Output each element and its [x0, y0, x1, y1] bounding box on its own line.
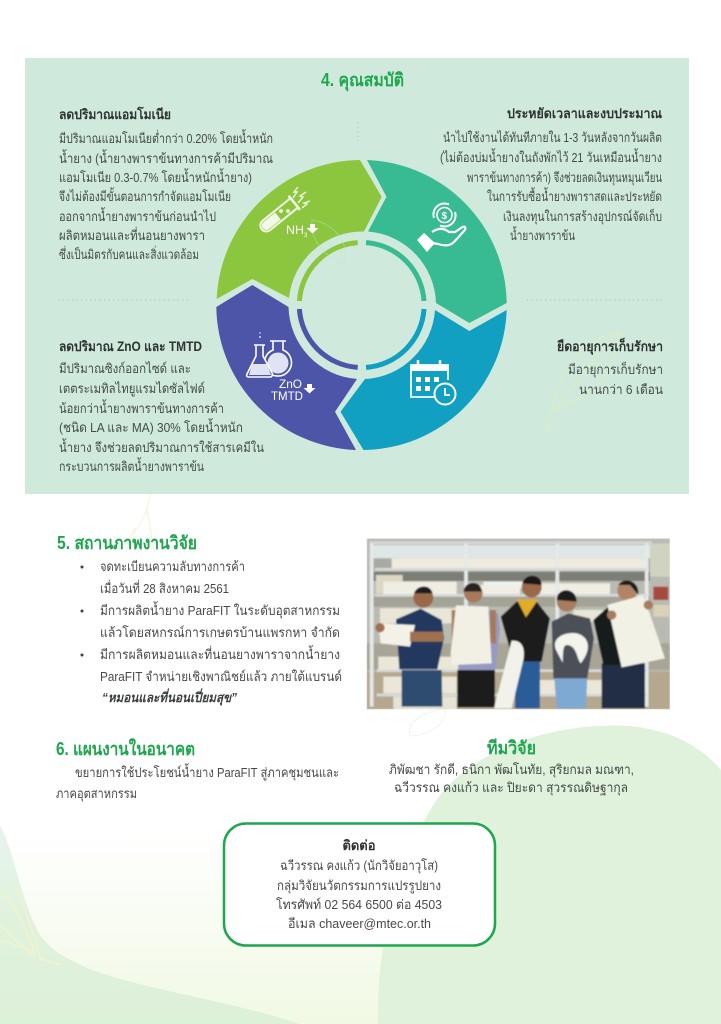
- segment: teal saving: [367, 160, 507, 323]
- contact box: โทรศัพท์ 02 564 6500 ต่อ 4503: [276, 897, 442, 912]
- text block: ZnO and TMTD: น้อยกว่าน้ำยางพาราข้นทางการค้า: [59, 399, 224, 416]
- icon: calendar and clock: [411, 360, 456, 404]
- person 5: [602, 663, 645, 708]
- icon: flasks ZnO TMTD: TMTD: [271, 391, 303, 403]
- contact box: อีเมล chaveer@mtec.or.th: [288, 916, 431, 931]
- text block: ZnO and TMTD: ลดปริมาณ ZnO และ TMTD: [59, 339, 202, 354]
- bullet list: [100, 559, 342, 706]
- text block: ammonia: ออกจากน้ำยางพาราข้นก่อนนำไป: [59, 207, 216, 224]
- contact box: กลุ่มวิจัยนวัตกรรมการแปรรูปยาง: [277, 878, 441, 894]
- inner ring arcs: [299, 243, 424, 367]
- bullet list: แล้วโดยสหกรณ์การเกษตรบ้านแพรกหา จำกัด: [100, 625, 340, 640]
- heading: ทีมวิจัย: [487, 738, 536, 758]
- text block: saving time and budget: (ไม่ต้องบ่มน้ำยางในถังพักไว้ 21 วันเหมือนน้ำยาง: [440, 148, 662, 165]
- panel: properties: [25, 58, 689, 946]
- page background: [0, 708, 721, 1024]
- segment: purple ZnO: [216, 285, 357, 450]
- text block: ZnO and TMTD: เตตระเมทิลไทยูแรมไดซัลไฟด์: [59, 381, 205, 397]
- section 6: future plan: [56, 738, 339, 802]
- icon: flasks ZnO TMTD: [247, 332, 316, 403]
- contact box: ติดต่อ: [342, 838, 376, 853]
- photo: research team holding latex pillows: [367, 538, 670, 709]
- bullet list: มีการผลิตหมอนและที่นอนยางพาราจากน้ำยาง: [100, 645, 340, 662]
- text block: ammonia: ลดปริมาณแอมโมเนีย: [59, 105, 171, 122]
- text block: saving time and budget: [440, 106, 662, 243]
- person 4: [554, 675, 587, 708]
- bullet list: จดทะเบียนความลับทางการค้า: [100, 559, 245, 574]
- text block: saving time and budget: ในการรับซื้อน้ำยางพาราสดและประหยัด: [487, 187, 662, 204]
- contact box: [224, 824, 495, 946]
- person 3: [515, 662, 540, 708]
- text block: saving time and budget: นำไปใช้งานได้ทันทีภายใน 1-3 วันหลังจากวันผลิต: [443, 130, 662, 145]
- leaf decoration near section 5: [118, 494, 154, 552]
- text block: ZnO and TMTD: มีปริมาณซิงก์ออกไซด์ และ: [59, 361, 191, 376]
- text block: saving time and budget: เงินลงทุนในการสร้างอุปกรณ์จัดเก็บ: [503, 207, 662, 225]
- segment: blue storage: [340, 310, 507, 450]
- person 1: [402, 670, 442, 707]
- icon: test tube NH3: NH: [286, 225, 304, 237]
- segment: green ammonia: [217, 160, 382, 299]
- icon: hand with coin: $: [442, 211, 448, 222]
- icon: test tube NH3: [256, 187, 318, 239]
- bullet list: ParaFIT จำหน่ายเชิงพาณิชย์แล้ว ภายใต้แบรนด์: [100, 669, 342, 684]
- section 6: future plan: ขยายการใช้ประโยชน์น้ำยาง ParaFIT สู่ภาคชุมชนและ: [75, 763, 339, 781]
- icon: hand with coin: [417, 204, 465, 252]
- text block: saving time and budget: พาราข้นทางการค้า) จึงช่วยลดเงินทุนหมุนเวียน: [467, 170, 662, 186]
- text block: ammonia: ซึ่งเป็นมิตรกับคนและสิ่งแวดล้อม: [59, 245, 199, 262]
- person 2: [457, 670, 495, 707]
- section 6: future plan: ภาคอุตสาหกรรม: [56, 786, 137, 802]
- text block: ammonia: มีปริมาณแอมโมเนียต่ำกว่า 0.20% โดยน้ำหนัก: [59, 129, 273, 146]
- text block: ammonia: [59, 105, 273, 262]
- research team: [389, 738, 634, 796]
- text block: saving time and budget: ประหยัดเวลาและงบประมาณ: [507, 106, 662, 121]
- text block: ZnO and TMTD: [59, 339, 264, 474]
- bullet list: มีการผลิตน้ำยาง ParaFIT ในระดับอุตสาหกรรม: [100, 601, 340, 619]
- text block: ZnO and TMTD: กระบวนการผลิตน้ำยางพาราข้น: [59, 457, 204, 474]
- icon: flasks ZnO TMTD: ZnO: [279, 379, 302, 391]
- icon: test tube NH3: 3: [304, 233, 308, 239]
- text block: ammonia: แอมโมเนีย 0.3-0.7% โดยน้ำหนักน้ำยาง): [59, 168, 252, 185]
- text block: shelf life: นานกว่า 6 เดือน: [579, 382, 663, 397]
- text block: saving time and budget: น้ำยางพาราข้น: [510, 226, 575, 243]
- heading: 5. สถานภาพงานวิจัย: [57, 533, 197, 553]
- text block: shelf life: ยืดอายุการเก็บรักษา: [557, 337, 663, 355]
- research team: ฉวีวรรณ คงแก้ว และ ปิยะดา สุวรรณดิษฐากุล: [394, 780, 628, 796]
- text block: ammonia: จึงไม่ต้องมีขั้นตอนการกำจัดแอมโมเนีย: [59, 187, 231, 204]
- research team: ภิพัฒชา รักดี, ธนิกา พัฒโนทัย, สุริยกมล มณฑา,: [389, 762, 634, 778]
- text block: shelf life: มีอายุการเก็บรักษา: [568, 360, 663, 378]
- section title: 4. คุณสมบัติ: [321, 70, 404, 92]
- donut diagram: [216, 160, 507, 450]
- leaf decoration: [547, 332, 620, 433]
- bullet list: เมื่อวันที่ 28 สิงหาคม 2561: [100, 580, 229, 596]
- text block: ZnO and TMTD: น้ำยาง จึงช่วยลดปริมาณการใช้สารเคมีใน: [59, 438, 264, 455]
- bullet list: “หมอนและที่นอนเปี่ยมสุข”: [102, 688, 237, 706]
- text block: ammonia: ผลิตหมอนและที่นอนยางพารา: [59, 227, 205, 243]
- text block: ZnO and TMTD: (ชนิด LA และ MA) 30% โดยน้ำหนัก: [59, 418, 243, 435]
- heading: 6. แผนงานในอนาคต: [56, 738, 195, 759]
- text block: ammonia: น้ำยาง (น้ำยางพาราข้นทางการค้ามีปริมาณ: [59, 149, 273, 166]
- section 5: research status: [57, 533, 342, 706]
- text block: shelf life: [557, 337, 663, 397]
- bullets: [80, 566, 84, 656]
- contact box: ฉวีวรรณ คงแก้ว (นักวิจัยอาวุโส): [280, 858, 438, 874]
